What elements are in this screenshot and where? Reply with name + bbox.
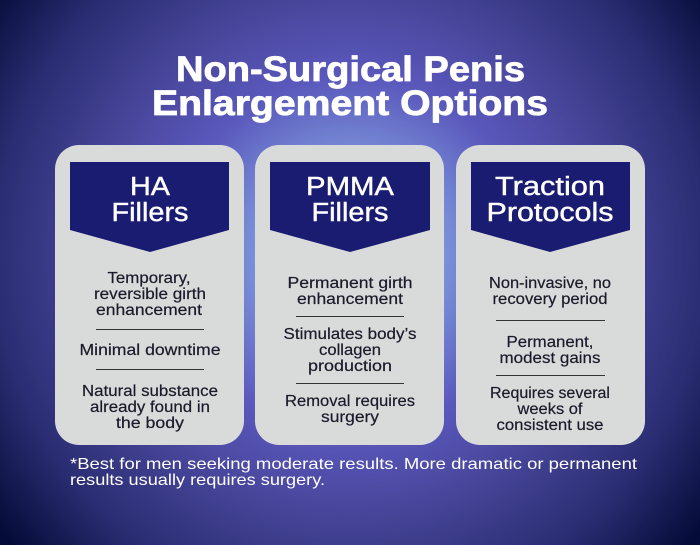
panel: PMMA Fillers <box>255 145 444 445</box>
benefit: non-invasive <box>489 275 611 308</box>
benefit: collagen: Stimulates body’s <box>284 326 417 343</box>
panel: HA Fillers <box>55 145 244 445</box>
banner <box>270 162 430 252</box>
benefit: natural substance <box>82 383 218 432</box>
benefit: removal: Removal requires <box>285 393 415 410</box>
banner: Fillers <box>112 199 188 227</box>
title: Non-Surgical Penis <box>176 50 525 89</box>
benefit: consistent use: weeks of <box>516 401 583 418</box>
benefit: permanent girth: enhancement <box>297 291 404 308</box>
card background <box>255 145 444 445</box>
title: Enlargement Options <box>152 84 548 123</box>
benefit: temporary: enhancement <box>96 302 203 319</box>
benefit: temporary <box>94 270 206 319</box>
benefit: natural substance: the body <box>116 415 184 432</box>
benefit: non-invasive: recovery period <box>492 291 608 308</box>
benefit: consistent use: Requires several <box>490 385 610 402</box>
benefit: removal <box>285 393 415 426</box>
banner: Protocols <box>486 199 614 227</box>
benefit: temporary: reversible girth <box>94 286 206 303</box>
footnote: *Best for men seeking moderate results. More dramatic or permanent <box>70 456 638 473</box>
benefit: natural substance: already found in <box>90 399 210 416</box>
benefit: permanent gains <box>500 334 601 367</box>
benefit: permanent girth <box>288 275 412 308</box>
benefit: temporary: Temporary, <box>108 270 190 287</box>
benefit: collagen: production <box>308 358 392 375</box>
footnote <box>70 456 638 489</box>
banner: HA <box>130 173 170 201</box>
benefit: collagen: collagen <box>319 342 381 359</box>
benefit: natural substance: Natural substance <box>82 383 218 400</box>
card background <box>55 145 244 445</box>
title <box>152 50 548 123</box>
benefit: collagen <box>284 326 417 375</box>
footnote: results usually requires surgery. <box>70 472 325 489</box>
benefit: non-invasive: Non-invasive, no <box>489 275 611 292</box>
benefit: consistent use <box>490 385 610 434</box>
benefit: permanent girth: Permanent girth <box>288 275 412 292</box>
banner <box>70 162 229 252</box>
benefit: downtime: Minimal downtime <box>80 342 220 359</box>
banner: PMMA <box>306 173 394 201</box>
panel: Traction Protocols <box>456 145 645 445</box>
benefit: permanent gains: modest gains <box>500 350 601 367</box>
benefit: permanent gains: Permanent, <box>506 334 594 351</box>
banner: Fillers <box>312 199 388 227</box>
banner <box>471 162 630 252</box>
benefit: removal: surgery <box>321 409 379 426</box>
card background <box>456 145 645 445</box>
benefit: consistent use: consistent use <box>496 417 604 434</box>
banner: Traction <box>495 173 605 201</box>
